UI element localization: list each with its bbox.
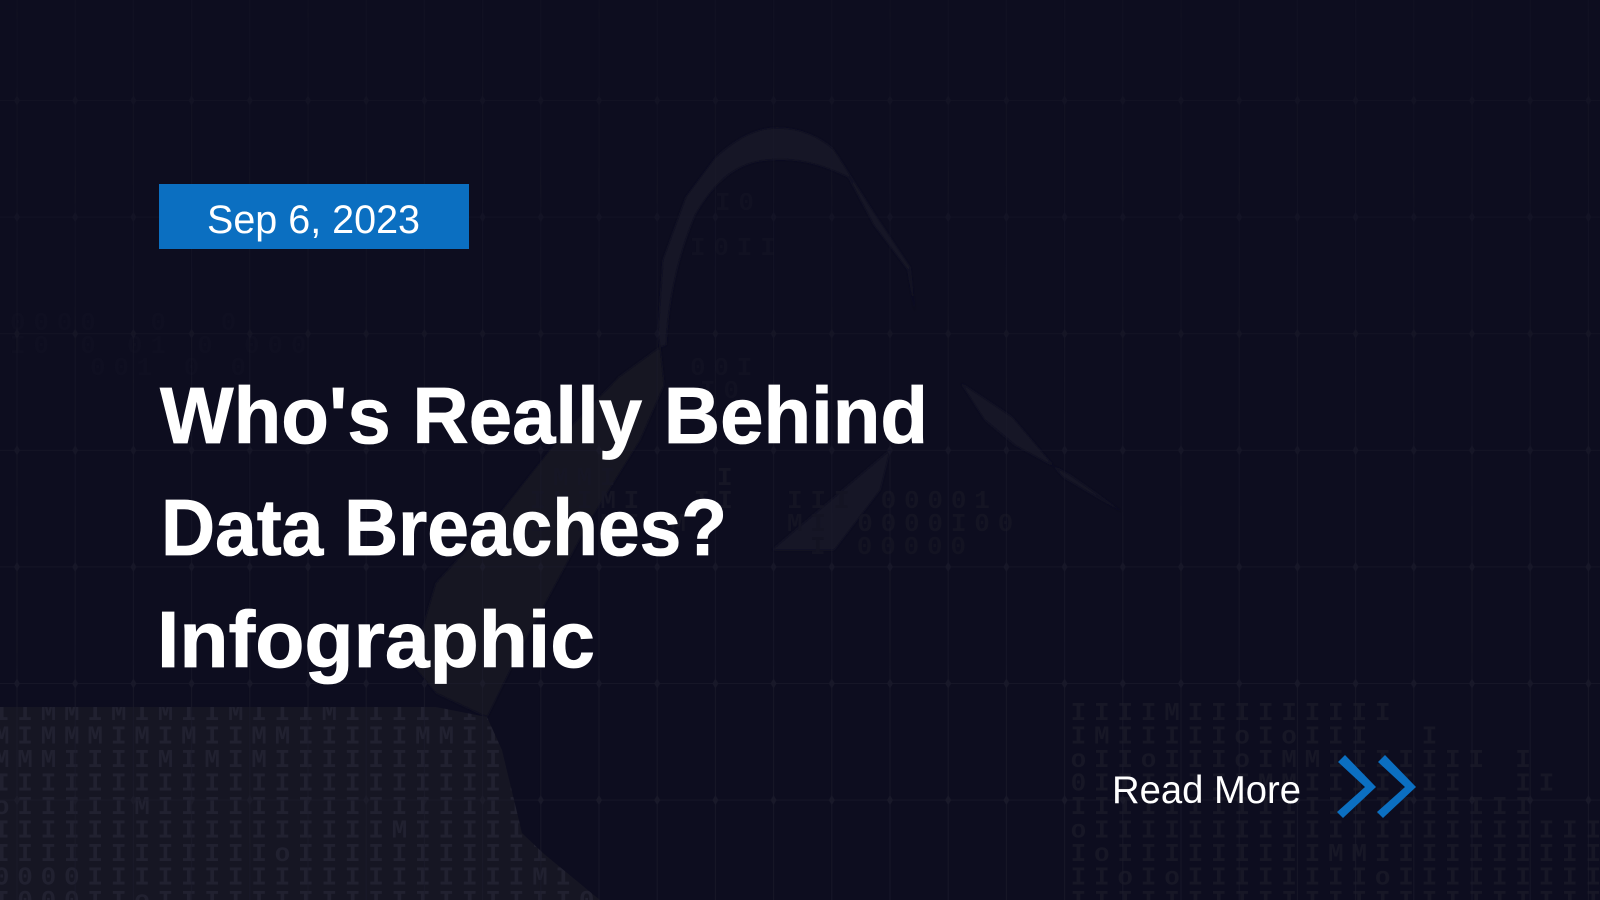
title (157, 371, 928, 684)
background: binary digits, centre and upper left (10, 188, 1021, 562)
background: binary digits, bottom left (0, 698, 602, 900)
background: binary digits, centre and upper left: MI 0000I00 (787, 509, 1021, 539)
read more link text: Read More (1112, 769, 1301, 812)
background: binary digits, centre and upper left: I0 (715, 188, 762, 218)
title: Who's Really Behind (160, 371, 928, 460)
background: binary digits, centre and upper left: I0 (700, 376, 747, 406)
background: circuit grid (0, 329, 1600, 900)
background: binary digits, bottom left: IIMMIMIMIIMIIIMIIIIIIIIIII (0, 698, 602, 728)
background: binary digits, centre and upper left: 001 0 0 (90, 353, 254, 383)
background: binary digits, bottom right: IMIIIIIoIoIII I (1071, 722, 1445, 752)
background: binary digits, bottom right (1071, 698, 1600, 900)
background: binary digits, bottom right: IoIIIIIIIIIMMIIIIIIIIII (1071, 839, 1600, 869)
background: binary digits, bottom left: MMMIIIIMIMIMIIIIIIIIIIIIII (0, 745, 602, 775)
title: Infographic (157, 595, 595, 684)
background: binary digits, bottom right: 0IIIIIIIMMIIIIIII II (1071, 768, 1562, 798)
background: binary digits, bottom right: IIIIIIIIIIIIIIIIIIII (1071, 792, 1539, 822)
background: binary digits, bottom left: 0000IIIIIIIIIIIIIIIIIIIMII (0, 862, 602, 892)
background: binary digits, centre and upper left: IMIMI II (530, 486, 741, 516)
background: binary digits, bottom left: oIIIIIMIIIIIIIIIIIIIIIIIII (0, 792, 602, 822)
background: binary digits, bottom right: IIIIMIIIIIIIII (1071, 698, 1398, 728)
background: binary digits, bottom right: oIIoIIIoIMMIIIIIII I (1071, 745, 1539, 775)
background: binary digits, bottom left: MIMMMIMIMIIMMIIIIIMMIIIIII (0, 722, 602, 752)
background: binary digits, centre and upper left: I0 0 01 0 000 (10, 331, 314, 361)
date badge: Sep 6, 2023 (207, 198, 420, 242)
background: binary digits, centre and upper left: I0II (690, 233, 784, 263)
background: binary digits, bottom left: IIIIIIIIIIIIIIIIIMIIIIIIII (0, 816, 602, 846)
background: binary digits, bottom left: IIIIIIIIIIIIoIIIIIIIIIIIII (0, 839, 602, 869)
background: binary digits, centre and upper left: I 00000 (810, 532, 974, 562)
background: binary digits, centre and upper left: 0000 0 0 (10, 308, 244, 338)
background: binary digits, bottom right: oIIIIIIIIIIIIIIIIIIIIII (1071, 816, 1600, 846)
date badge (159, 184, 469, 249)
icon: double chevron arrow (1337, 755, 1416, 818)
background: binary digits, bottom left: IIIIIIIIIIIIIIIIIIIIIIIIII (0, 768, 602, 798)
background: binary digits, bottom right: IIoIoIIIIIIIIoIIIIIIIII (1071, 862, 1600, 892)
background: binary digits, centre and upper left: III 00001 (787, 486, 998, 516)
title: Data Breaches? (161, 483, 727, 572)
background: hacker silhouette (415, 128, 1124, 717)
background: binary digits, centre and upper left: IIMMIIM (530, 509, 694, 539)
background: binary digits, centre and upper left: 00I (690, 353, 760, 383)
background: binary digits, centre and upper left: MMI I (553, 463, 740, 493)
background: lit binary band, bottom left (0, 707, 600, 900)
